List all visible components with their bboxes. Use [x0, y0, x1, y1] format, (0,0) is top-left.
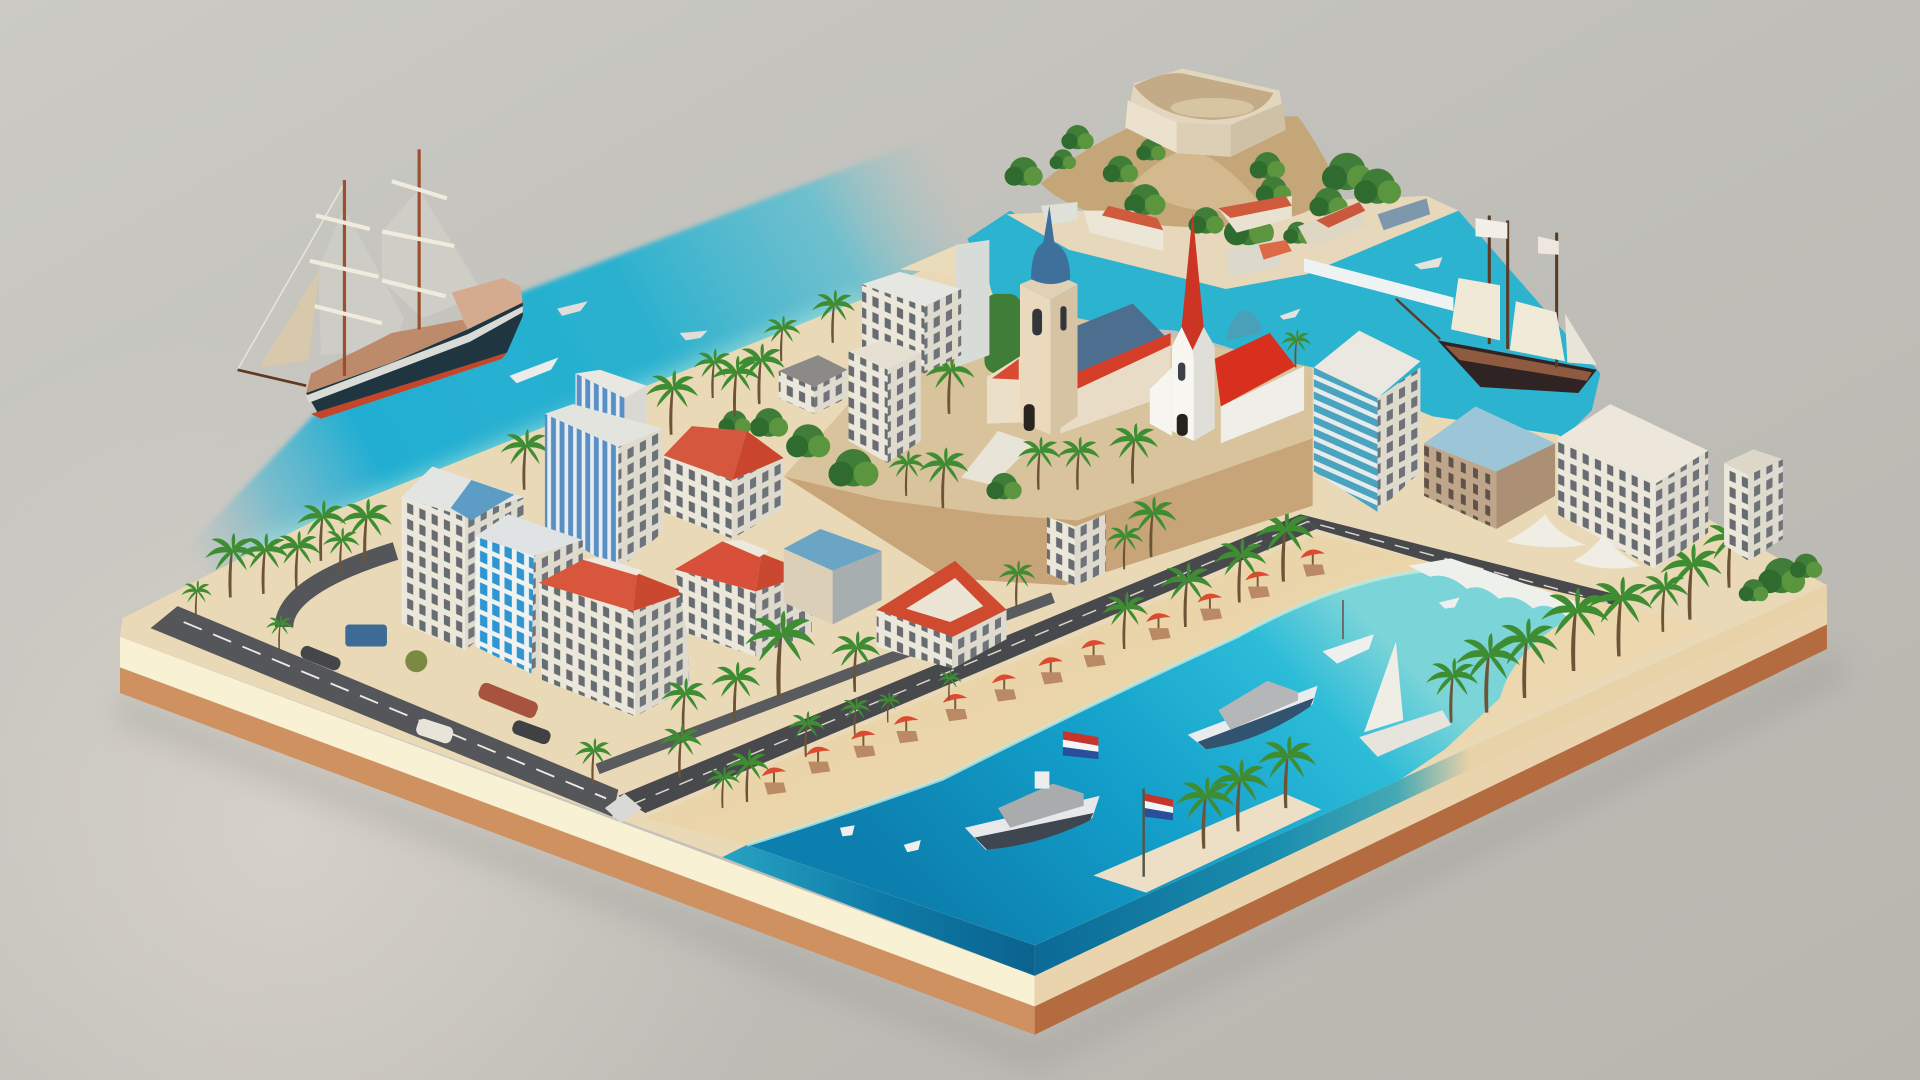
- boat: front grey ship: [965, 771, 1100, 850]
- beach palms: [706, 510, 1758, 808]
- white tents: [1506, 514, 1641, 568]
- pale shallows along the shore: [245, 306, 869, 563]
- far village: [1041, 196, 1430, 277]
- jib sail: [260, 269, 320, 367]
- sailing ship right: [1396, 216, 1597, 393]
- central sand plateau: [719, 294, 1313, 585]
- church with blue dome: [987, 206, 1171, 435]
- building: red roof front: [539, 557, 689, 716]
- small yacht: [1322, 600, 1374, 664]
- main beach road: [618, 514, 1629, 813]
- small boats in channel: [1280, 257, 1442, 320]
- flag in bay: [1063, 731, 1098, 759]
- left annex: [987, 356, 1020, 424]
- back building cluster: [779, 240, 989, 463]
- masts: [343, 180, 346, 376]
- dome: [1031, 206, 1070, 284]
- rear sails: [382, 190, 484, 318]
- fortress: [1125, 69, 1286, 157]
- small boats in bay: [840, 598, 1460, 852]
- stern cabin: [452, 278, 523, 329]
- building: blue roof brown: [1424, 407, 1555, 529]
- yards: [310, 181, 454, 323]
- flag on islet: [1142, 789, 1173, 877]
- church with red spire: [1150, 213, 1304, 443]
- right green shrubs: [1739, 554, 1822, 601]
- building: red roof rear: [664, 426, 784, 539]
- green behind the church: [984, 294, 1021, 373]
- palms in front of town: [266, 561, 1035, 784]
- boat: middle grey ship: [1188, 681, 1318, 749]
- island quay: [1007, 196, 1458, 289]
- channel water: [967, 211, 1600, 447]
- nave roof: [1215, 333, 1296, 407]
- building: red roof middle: [675, 540, 812, 656]
- building: white left: [402, 467, 524, 650]
- small boats behind town: [509, 301, 708, 383]
- building: red roof corner: [877, 561, 1007, 669]
- hull: [306, 300, 523, 414]
- building: striped blue tower: [545, 370, 662, 569]
- building: white right: [1558, 404, 1708, 569]
- fortress bastions: [1125, 100, 1177, 153]
- far island with hill and fortress: [1005, 69, 1458, 289]
- water slab front face: [722, 845, 1035, 976]
- beach umbrellas: [762, 550, 1325, 795]
- garden trees: [719, 408, 1022, 499]
- far bridge: [1304, 258, 1453, 311]
- right side layers: [1035, 585, 1827, 976]
- top land surface: [120, 242, 1827, 945]
- nave wall: [1060, 343, 1171, 433]
- deck: [306, 320, 468, 393]
- street clutter and cars: [299, 624, 552, 746]
- hill: [1041, 116, 1341, 227]
- curved side road: [284, 551, 396, 627]
- palm beside red church: [1281, 329, 1311, 367]
- bay water: [747, 569, 1580, 945]
- left road: [151, 606, 618, 817]
- tower: blue glass right: [1314, 331, 1420, 512]
- rear dome: [1226, 310, 1261, 340]
- fluted wall: [1221, 366, 1304, 443]
- left side layers: [120, 637, 1035, 1007]
- shoreline foam: [747, 569, 1439, 845]
- sailing ship left: [238, 149, 523, 419]
- fortress interior: [1134, 73, 1273, 120]
- building: small grey mid: [1047, 514, 1106, 585]
- nave roof: [1074, 304, 1171, 378]
- bowsprit: [238, 370, 306, 386]
- bridge: [1408, 558, 1580, 617]
- back beach curl: [900, 246, 984, 276]
- platform shadow: [118, 649, 1849, 1071]
- sand islet with palms: [1093, 736, 1321, 893]
- steeple: [1172, 347, 1194, 441]
- building: blue roof low: [784, 529, 882, 624]
- sailboat: [1359, 642, 1451, 757]
- building: blue and white: [475, 514, 583, 673]
- left tree line: [181, 290, 974, 618]
- tower: [1020, 284, 1051, 435]
- beach: [645, 535, 1708, 945]
- rigging: [238, 184, 344, 370]
- platform base: [120, 242, 1827, 1035]
- red eaves: [1060, 333, 1171, 397]
- sea behind the town: [184, 137, 1029, 600]
- crosswalk: [605, 793, 642, 823]
- town service road: [598, 598, 1053, 769]
- bushes: [1005, 125, 1401, 245]
- building: small right: [1724, 449, 1783, 561]
